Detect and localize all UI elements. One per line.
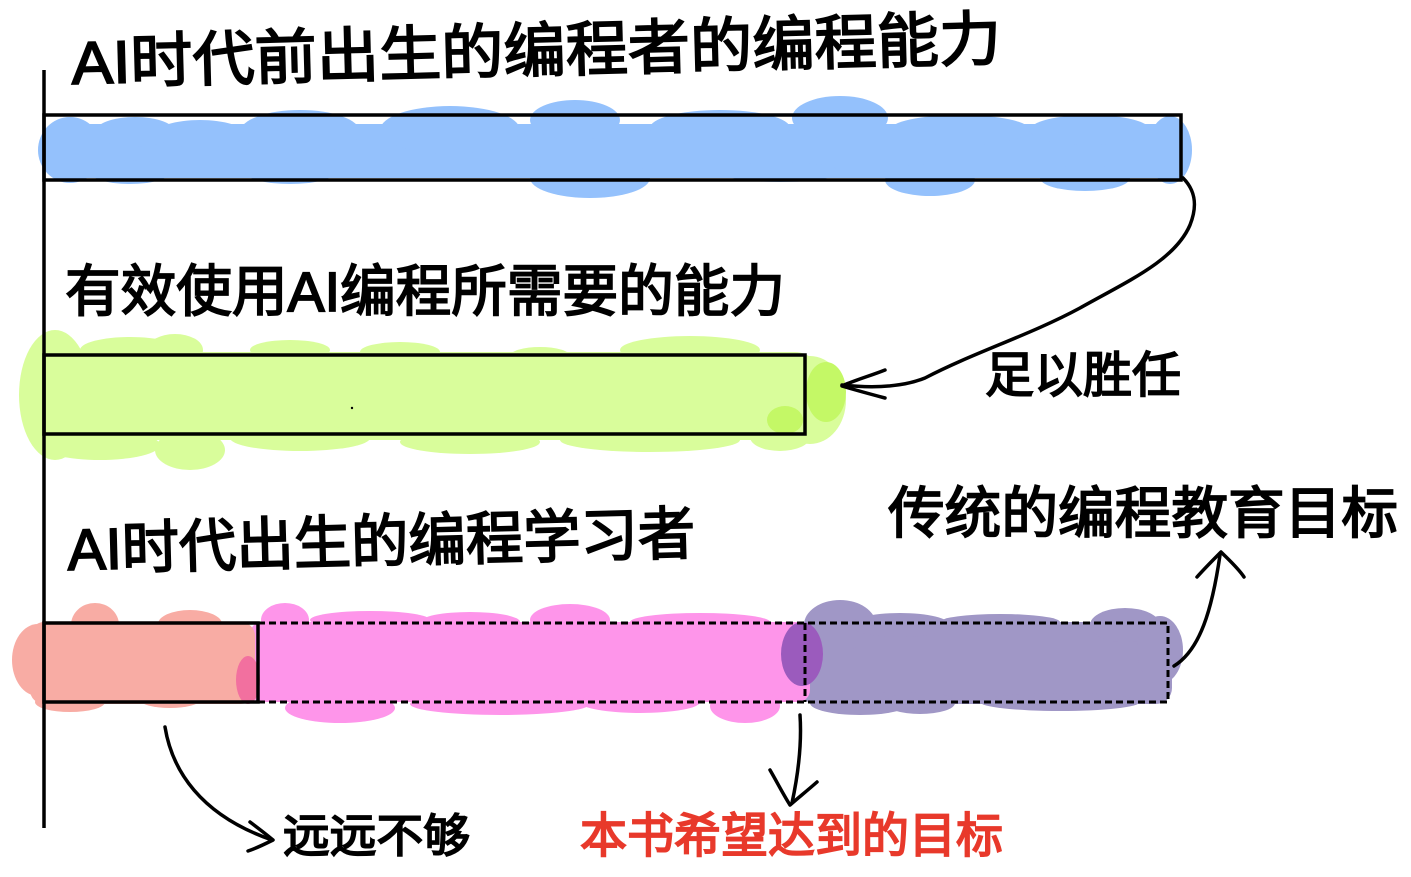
salmon highlighter scribble	[12, 603, 255, 712]
heading: ability needed for AI programming: 有效使用AI编程所需要的能力	[65, 260, 785, 323]
bar outline: pre-AI programmers	[44, 115, 1181, 180]
arrow: to traditional goal	[1174, 552, 1244, 666]
arrow: to book goal	[770, 715, 817, 805]
vertical axis	[42, 70, 46, 828]
arrow: to far from enough	[165, 727, 273, 851]
arrow: from top bar to needed ability	[842, 178, 1194, 398]
bar outline: learners solid	[44, 623, 258, 702]
title: pre-AI programmers ability: AI时代前出生的编程者的编程能力	[71, 6, 1002, 97]
label: goal of this book (red): 本书希望达到的目标	[580, 810, 1003, 863]
bar outline: ability needed	[44, 355, 805, 434]
bar outline: target dashed	[258, 623, 1168, 702]
label: traditional education goal: 传统的编程教育目标	[888, 482, 1398, 545]
pink highlighter scribble	[250, 603, 810, 723]
label: far from enough: 远远不够	[283, 810, 470, 862]
green highlighter scribble	[19, 330, 846, 470]
blue highlighter scribble	[38, 96, 1192, 198]
label: enough: 足以胜任	[985, 349, 1181, 403]
overlap blots	[236, 622, 823, 704]
heading: programming learners born in AI era: AI时代出生的编程学习者	[67, 502, 696, 583]
purple highlighter scribble	[800, 600, 1183, 715]
green overlap blots	[767, 362, 846, 434]
